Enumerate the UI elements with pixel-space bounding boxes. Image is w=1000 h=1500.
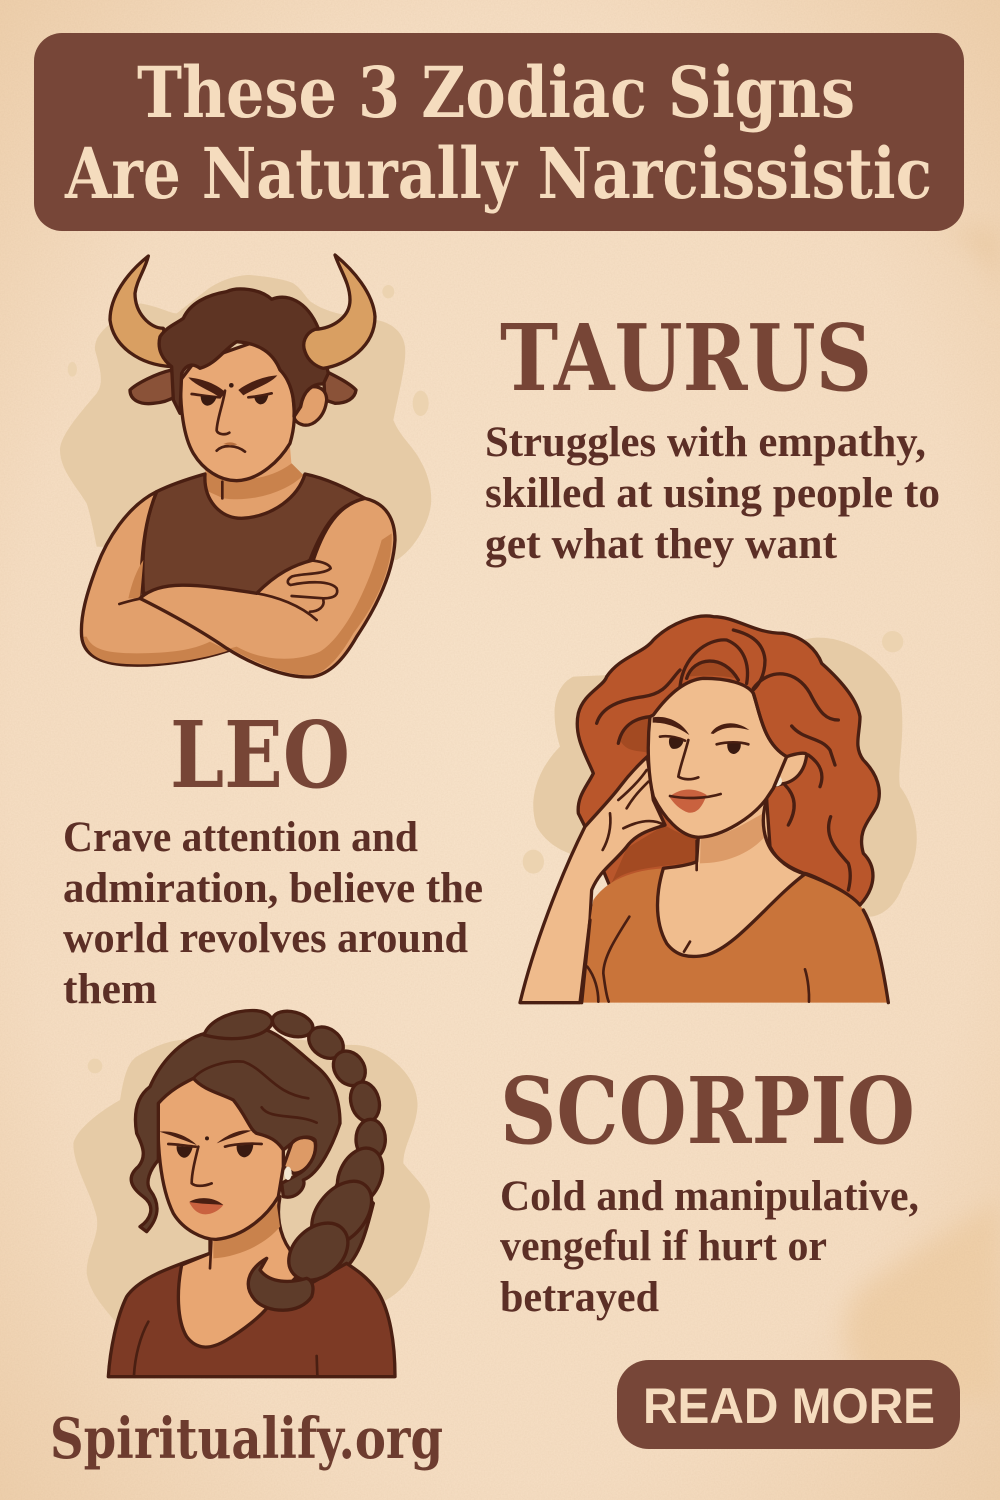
eyebrows: [653, 717, 749, 735]
hair mass: [577, 616, 879, 905]
braid upper segments: [270, 1007, 391, 1292]
ear: [293, 387, 327, 425]
face: [158, 1078, 283, 1239]
eyes: [192, 383, 272, 406]
left horn: [110, 256, 172, 367]
text: Taurus description: Struggles with empathy,: [485, 419, 926, 466]
illustration: Leo woman with wavy hair: [520, 616, 917, 1003]
text: Taurus description: [485, 419, 940, 568]
eyebrows: [159, 1130, 252, 1145]
face: [181, 340, 300, 481]
lips: [669, 790, 721, 813]
left arm: [81, 492, 230, 665]
top: [583, 868, 888, 1003]
hair: [159, 289, 328, 417]
nose and mouth: [217, 391, 245, 452]
lips: [189, 1198, 223, 1214]
neckline fold lines: [134, 1322, 317, 1375]
hair: [131, 1030, 340, 1232]
heading: SCORPIO: SCORPIO: [500, 1057, 915, 1165]
text: Leo description: [63, 814, 483, 1013]
braid back section: [286, 1173, 373, 1282]
top: [108, 1253, 395, 1377]
eyes: [168, 1136, 262, 1158]
heading: TAURUS: TAURUS: [500, 304, 872, 412]
text: Taurus description: get what they want: [485, 521, 838, 568]
tank top: [143, 474, 365, 593]
text: Leo description: admiration, believe the: [63, 865, 483, 912]
bull ears: [130, 370, 356, 404]
earring: [284, 1167, 292, 1180]
text: Taurus description: skilled at using people to: [485, 470, 940, 517]
eyes: [660, 736, 748, 754]
right arm crossed: [140, 498, 395, 677]
text: Scorpio description: Cold and manipulative,: [500, 1173, 919, 1220]
brand: Spiritualify.org: Spiritualify.org: [50, 1406, 443, 1472]
ear: [283, 1137, 316, 1173]
text: Leo description: world revolves around: [63, 915, 468, 962]
nose: [678, 740, 698, 779]
hair shadow: [610, 825, 698, 887]
scorpion stinger: [248, 1258, 313, 1310]
text: Scorpio description: vengeful if hurt or: [500, 1223, 827, 1270]
eyebrows: [188, 375, 277, 398]
text: Scorpio description: [500, 1173, 919, 1321]
text: Leo description: Crave attention and: [63, 814, 418, 861]
title banner: [34, 33, 964, 231]
illustration: Scorpio woman with scorpion-tail braid: [73, 1007, 430, 1377]
button: READ MORE: [617, 1360, 960, 1449]
face: [648, 678, 787, 837]
hair bun: [204, 1011, 272, 1039]
illustration: Taurus man with bull horns: [60, 255, 431, 677]
text: Scorpio description: betrayed: [500, 1274, 659, 1321]
neck and chest: [657, 800, 805, 956]
sleeve and fold lines: [587, 917, 809, 1002]
title text: These 3 Zodiac Signs: [137, 51, 855, 134]
hair strands: [597, 630, 860, 905]
arm and hand: [520, 757, 665, 1003]
fingers: [603, 770, 664, 850]
hair strands: [193, 1061, 317, 1123]
heading: LEO: LEO: [170, 701, 350, 809]
right horn: [304, 255, 375, 368]
neck and chest: [178, 1197, 297, 1347]
text: Leo description: them: [63, 966, 157, 1013]
ear and earring: [770, 753, 807, 787]
nose: [192, 1147, 212, 1186]
neck: [205, 447, 305, 518]
button: READ MORE: READ MORE: [643, 1378, 935, 1434]
hand and fingers: [119, 561, 337, 620]
